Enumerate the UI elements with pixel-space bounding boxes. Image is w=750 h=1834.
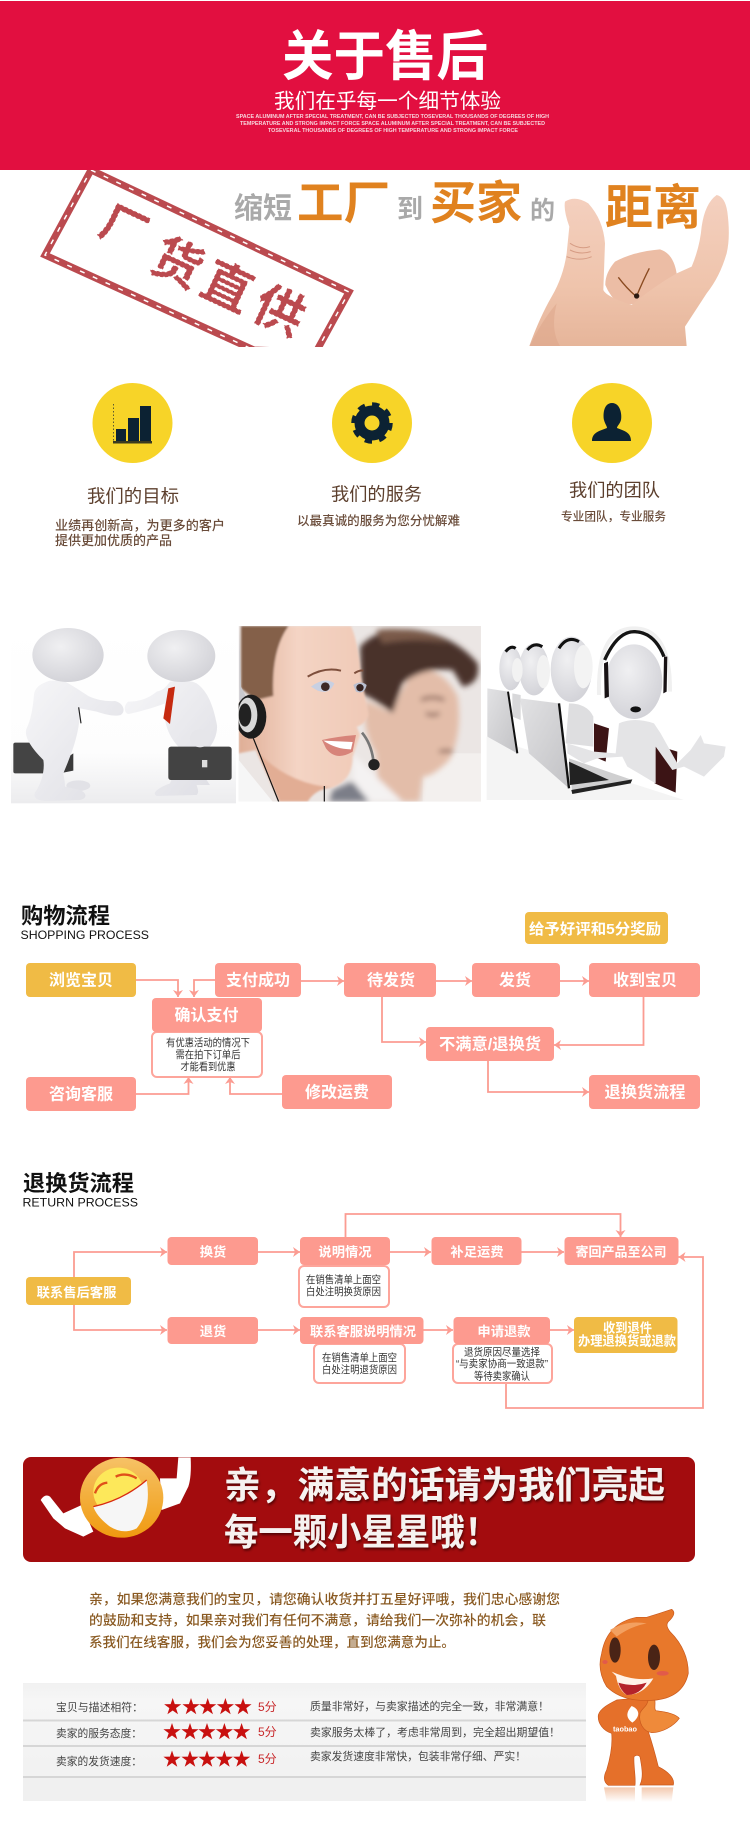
step: 申请退款 with note: 申请退款 <box>477 1323 531 1339</box>
column: 我们的服务 <box>297 383 460 528</box>
slogan: 缩短工厂到买家的距离: 缩短 <box>234 192 292 225</box>
slogan: 缩短工厂到买家的距离: 距离 <box>605 182 701 235</box>
row: 宝贝与描述相符 <box>56 1698 549 1714</box>
column: 我们的目标 <box>55 383 225 548</box>
step: 申请退款 with note: 退货原因尽量选择 <box>464 1346 540 1358</box>
description: 专业团队，专业服务 <box>561 510 666 524</box>
return flow chart <box>26 1214 703 1408</box>
step: 退货 <box>168 1317 258 1344</box>
heading: return process: RETURN PROCESS <box>22 1196 138 1210</box>
photo: 3D support team with laptops <box>487 628 726 800</box>
thank-you paragraph: 亲，如果您满意我们的宝贝，请您确认收货并打五星好评哦，我们忠心感谢您 <box>89 1591 560 1607</box>
slogan: 缩短工厂到买家的距离: 的 <box>530 197 555 225</box>
step: 联系客服说明情况 with note: 联系客服说明情况 <box>310 1323 417 1339</box>
slogan: 缩短工厂到买家的距离: 买家 <box>430 177 522 229</box>
arrows <box>74 1214 703 1408</box>
step: 浏览宝贝 <box>26 963 136 997</box>
step: 收到退件: 办理退换货或退款 <box>578 1332 677 1348</box>
step: 支付成功: 支付成功 <box>226 970 290 990</box>
callout: 给予好评和5分奖励 <box>525 912 668 944</box>
heading: shopping process: 购物流程 <box>21 904 110 928</box>
banner text: 每一颗小星星哦！ <box>224 1512 499 1553</box>
step: 联系客服说明情况 with note <box>300 1317 424 1383</box>
heading: return process: 退换货流程 <box>23 1171 134 1196</box>
step: 申请退款 with note: “与卖家协商一致退款” <box>456 1357 548 1370</box>
step: 确认支付 with note: 需在拍下订单后 <box>176 1048 240 1061</box>
english caption: TEMPERATURE AND STRONG IMPACT FORCE SPACE ALUMINUM AFTER SPECIAL TREATMENT, CAN BE SUBJECTED <box>240 121 545 127</box>
stamp: 厂货直供: 厂 <box>92 195 156 262</box>
photo: call center agents <box>236 626 481 802</box>
step: 收到退件 <box>574 1317 678 1353</box>
title: 关于售后 <box>282 27 488 87</box>
thank-you paragraph: 的鼓励和支持，如果亲对我们有任何不满意，请给我们一次弥补的机会，联 <box>89 1612 546 1628</box>
arrows <box>136 980 644 1094</box>
english caption <box>236 114 549 134</box>
shopping flow chart <box>26 912 700 1111</box>
step: 申请退款 with note: 等待卖家确认 <box>474 1370 530 1382</box>
step: 联系售后客服: 联系售后客服 <box>37 1284 117 1300</box>
red banner: rate us <box>23 1457 695 1562</box>
stamp: 厂货直供: 供 <box>245 276 314 348</box>
step: 退货: 退货 <box>200 1323 226 1339</box>
header banner <box>0 1 750 170</box>
row: 宝贝与描述相符: 5分 <box>258 1700 277 1714</box>
icon: person <box>572 383 652 463</box>
row: 卖家的服务态度: 5分 <box>258 1725 277 1739</box>
callout: 给予好评和5分奖励: 给予好评和5分奖励 <box>529 920 661 938</box>
slogan: 缩短工厂到买家的距离 <box>234 177 701 235</box>
step: 说明情况 with note: 说明情况 <box>318 1244 372 1260</box>
step: 退换货流程: 退换货流程 <box>604 1082 686 1102</box>
slogan: 缩短工厂到买家的距离: 到 <box>397 194 423 224</box>
step: 收到宝贝 <box>589 963 700 997</box>
step: 收到退件: 收到退件 <box>603 1320 652 1336</box>
icon: hand pinching <box>529 195 729 346</box>
step: 说明情况 with note: 在销售清单上面空 <box>306 1273 381 1286</box>
row: 卖家的发货速度 <box>56 1749 526 1768</box>
step: 补足运费: 补足运费 <box>450 1244 504 1260</box>
row: 卖家的服务态度: 卖家的服务态度： <box>56 1726 142 1740</box>
heading: shopping process: SHOPPING PROCESS <box>20 929 149 942</box>
heading: 我们的目标 <box>87 486 179 506</box>
step: 确认支付 with note: 有优惠活动的情况下 <box>166 1036 250 1049</box>
heading: return process <box>22 1171 138 1210</box>
step: 说明情况 with note <box>299 1237 390 1307</box>
row: 宝贝与描述相符: 质量非常好，与卖家描述的完全一致，非常满意！ <box>310 1699 549 1713</box>
rating table <box>23 1683 586 1801</box>
thank-you paragraph: 系我们在线客服，我们会为您妥善的处理，直到您满意为止。 <box>89 1634 455 1650</box>
step: 说明情况 with note: 白处注明换货原因 <box>306 1285 381 1298</box>
row: 卖家的发货速度: 卖家的发货速度： <box>56 1754 142 1768</box>
heading: shopping process <box>20 904 149 942</box>
step: 咨询客服: 咨询客服 <box>49 1084 113 1104</box>
row: 卖家的发货速度: 卖家发货速度非常快，包装非常仔细、严实！ <box>310 1749 526 1763</box>
mascot: taobao doll <box>598 1609 688 1802</box>
step: 修改运费 <box>282 1075 392 1109</box>
banner text <box>224 1465 665 1553</box>
row: 卖家的服务态度 <box>56 1723 560 1740</box>
step: 确认支付 with note: 确认支付 <box>174 1006 239 1024</box>
description <box>55 518 225 548</box>
description: 提供更加优质的产品 <box>55 533 172 548</box>
description: 以最真诚的服务为您分忧解难 <box>297 513 460 528</box>
icon: bar chart <box>92 383 172 463</box>
step: 待发货: 待发货 <box>367 970 415 990</box>
row: 宝贝与描述相符: 宝贝与描述相符： <box>56 1700 143 1714</box>
row: 卖家的服务态度: 卖家服务太棒了，考虑非常周到，完全超出期望值！ <box>310 1725 560 1739</box>
icon: winged smiley <box>41 1457 191 1538</box>
step: 支付成功 <box>215 963 301 997</box>
slogan: 缩短工厂到买家的距离: 工厂 <box>297 177 390 229</box>
factory direct banner <box>45 170 729 352</box>
stamp: 厂货直供 <box>45 170 349 352</box>
step: 联系售后客服 <box>26 1277 131 1305</box>
row: 卖家的发货速度: 5分 <box>258 1752 277 1766</box>
step: 确认支付 with note <box>152 998 262 1077</box>
step: 联系客服说明情况 with note: 白处注明退货原因 <box>322 1363 397 1376</box>
icon: gear <box>332 383 412 463</box>
english caption: SPACE ALUMINUM AFTER SPECIAL TREATMENT, CAN BE SUBJECTED TOSEVERAL THOUSANDS OF DEGREES OF HIGH <box>236 114 549 120</box>
step: 浏览宝贝: 浏览宝贝 <box>49 970 113 990</box>
step: 待发货 <box>344 963 436 997</box>
stamp: 厂货直供: 货 <box>143 228 212 300</box>
step: 确认支付 with note: 才能看到优惠 <box>180 1060 236 1073</box>
step: 不满意/退换货: 不满意/退换货 <box>439 1034 541 1054</box>
photo: handshake figures <box>11 623 236 803</box>
step: 发货 <box>472 963 560 997</box>
english caption: TOSEVERAL THOUSANDS OF DEGREES OF HIGH TEMPERATURE AND STRONG IMPACT FORCE <box>268 128 518 134</box>
step: 修改运费: 修改运费 <box>305 1084 369 1102</box>
mascot: taobao doll: taobao <box>613 1725 638 1734</box>
step: 补足运费 <box>432 1237 522 1265</box>
thank-you paragraph <box>89 1591 560 1650</box>
step: 收到宝贝: 收到宝贝 <box>613 970 677 990</box>
stamp: 厂货直供: 直 <box>193 252 262 324</box>
step: 联系客服说明情况 with note: 在销售清单上面空 <box>322 1351 397 1364</box>
step: 寄回产品至公司: 寄回产品至公司 <box>576 1244 666 1260</box>
subtitle: 我们在乎每一个细节体验 <box>274 90 501 113</box>
step: 不满意/退换货 <box>426 1027 554 1061</box>
heading: 我们的团队 <box>569 480 660 500</box>
step: 发货: 发货 <box>499 970 531 990</box>
banner text: 亲，满意的话请为我们亮起 <box>224 1465 665 1506</box>
step: 寄回产品至公司 <box>564 1237 678 1265</box>
heading: 我们的服务 <box>331 484 422 504</box>
step: 申请退款 with note <box>453 1317 552 1383</box>
description: 业绩再创新高，为更多的客户 <box>55 518 225 533</box>
column: 我们的团队 <box>561 383 666 524</box>
step: 换货: 换货 <box>200 1244 226 1260</box>
step: 咨询客服 <box>26 1077 136 1111</box>
step: 换货 <box>168 1237 258 1265</box>
step: 退换货流程 <box>589 1075 700 1109</box>
